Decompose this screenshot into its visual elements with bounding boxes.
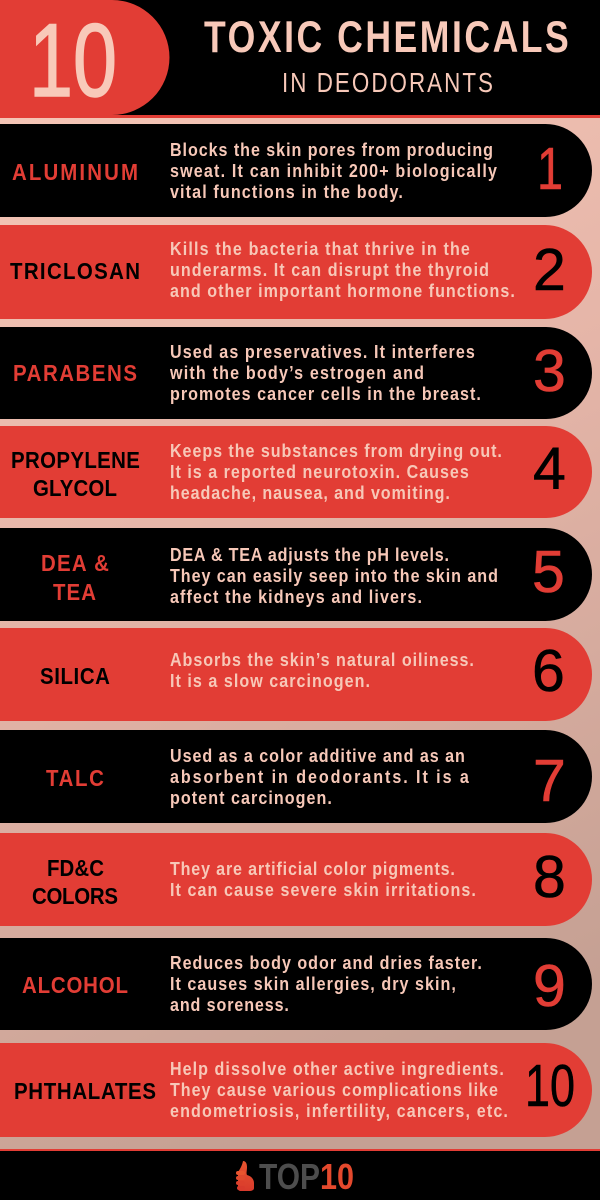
row 3: parabens: promotes cancer cells in the breast.	[170, 383, 481, 404]
row 7: talc: Used as a color additive and as an	[170, 745, 465, 766]
row 6: silica: Absorbs the skin’s natural oiliness.	[170, 649, 474, 670]
row 8: fd and c colors: FD&C	[47, 855, 104, 881]
row 7: talc	[0, 730, 592, 823]
row 8: fd and c colors	[0, 833, 592, 926]
row 10: phthalates	[0, 1043, 592, 1137]
row 10: phthalates: They cause various complications like	[170, 1079, 498, 1100]
row 1: aluminum: vital functions in the body.	[170, 181, 403, 202]
row 4: propylene glycol: GLYCOL	[33, 475, 117, 501]
row 6: silica	[0, 628, 592, 721]
row 10: phthalates: PHTHALATES	[14, 1078, 156, 1104]
row 9: alcohol: 9	[533, 953, 566, 1019]
row 4: propylene glycol: headache, nausea, and vomiting.	[170, 482, 450, 503]
logo number: 10	[320, 1156, 354, 1197]
row 3: parabens: with the body’s estrogen and	[169, 362, 424, 383]
row 3: parabens: PARABENS	[13, 360, 137, 386]
row 9: alcohol: It causes skin allergies, dry skin,	[170, 973, 456, 994]
row 4: propylene glycol	[0, 426, 592, 518]
row 7: talc: 7	[533, 748, 566, 814]
row 7: talc: TALC	[46, 765, 104, 791]
row 5: dea and tea: DEA & TEA adjusts the pH levels.	[170, 544, 449, 565]
row 1: aluminum: sweat. It can inhibit 200+ biologically	[170, 160, 497, 181]
row 3: parabens	[0, 327, 592, 419]
row 9: alcohol	[0, 938, 592, 1030]
row 4: propylene glycol: PROPYLENE	[11, 447, 140, 473]
title: TOXIC CHEMICALS	[204, 12, 569, 62]
row 8: fd and c colors: They are artificial color pigments.	[170, 858, 455, 879]
row 7: talc: potent carcinogen.	[170, 787, 332, 808]
row 10: phthalates: Help dissolve other active ingredients.	[170, 1058, 504, 1079]
row 8: fd and c colors: COLORS	[32, 883, 118, 909]
big number 10: 10	[29, 3, 117, 119]
row 4: propylene glycol: 4	[533, 436, 566, 502]
row 5: dea and tea: They can easily seep into the skin and	[170, 565, 498, 586]
logo wordmark: TOP	[259, 1156, 320, 1197]
row 6: silica: SILICA	[40, 663, 110, 689]
row 2: triclosan: and other important hormone functions.	[170, 280, 515, 301]
row 9: alcohol: ALCOHOL	[22, 972, 128, 998]
icon: thumbs up	[236, 1161, 254, 1191]
row 1: aluminum: ALUMINUM	[12, 159, 138, 185]
row 2: triclosan: underarms. It can disrupt the thyroid	[170, 259, 489, 280]
row 9: alcohol: and soreness.	[170, 994, 289, 1015]
row 1: aluminum: 1	[537, 136, 563, 202]
row 5: dea and tea: TEA	[53, 579, 96, 605]
row 6: silica: It is a slow carcinogen.	[170, 670, 370, 691]
row 10: phthalates: 10	[525, 1053, 575, 1119]
row 4: propylene glycol: It is a reported neurotoxin. Causes	[170, 461, 469, 482]
row 1: aluminum: Blocks the skin pores from producing	[170, 139, 493, 160]
row 7: talc: absorbent in deodorants. It is a	[170, 766, 469, 787]
header tab	[0, 0, 169, 115]
row 5: dea and tea: DEA &	[41, 550, 109, 576]
row 1: aluminum	[0, 124, 592, 217]
header	[0, 0, 600, 119]
row 3: parabens: Used as preservatives. It interferes	[170, 341, 475, 362]
row 8: fd and c colors: 8	[533, 844, 566, 910]
row 10: phthalates: endometriosis, infertility, cancers, etc.	[170, 1100, 508, 1121]
row 5: dea and tea: 5	[532, 539, 565, 605]
row 8: fd and c colors: It can cause severe skin irritations.	[170, 879, 476, 900]
row 2: triclosan: TRICLOSAN	[10, 258, 140, 284]
subtitle: IN DEODORANTS	[282, 68, 493, 99]
row 5: dea and tea: affect the kidneys and livers.	[170, 586, 422, 607]
row 4: propylene glycol: Keeps the substances from drying out.	[170, 440, 502, 461]
row 3: parabens: 3	[533, 338, 566, 404]
footer	[0, 1149, 600, 1200]
row 2: triclosan	[0, 225, 592, 319]
row 2: triclosan: Kills the bacteria that thrive in the	[170, 238, 470, 259]
row 5: dea and tea	[0, 528, 592, 621]
row 6: silica: 6	[532, 638, 565, 704]
row 2: triclosan: 2	[533, 237, 566, 303]
row 9: alcohol: Reduces body odor and dries faster.	[170, 952, 482, 973]
